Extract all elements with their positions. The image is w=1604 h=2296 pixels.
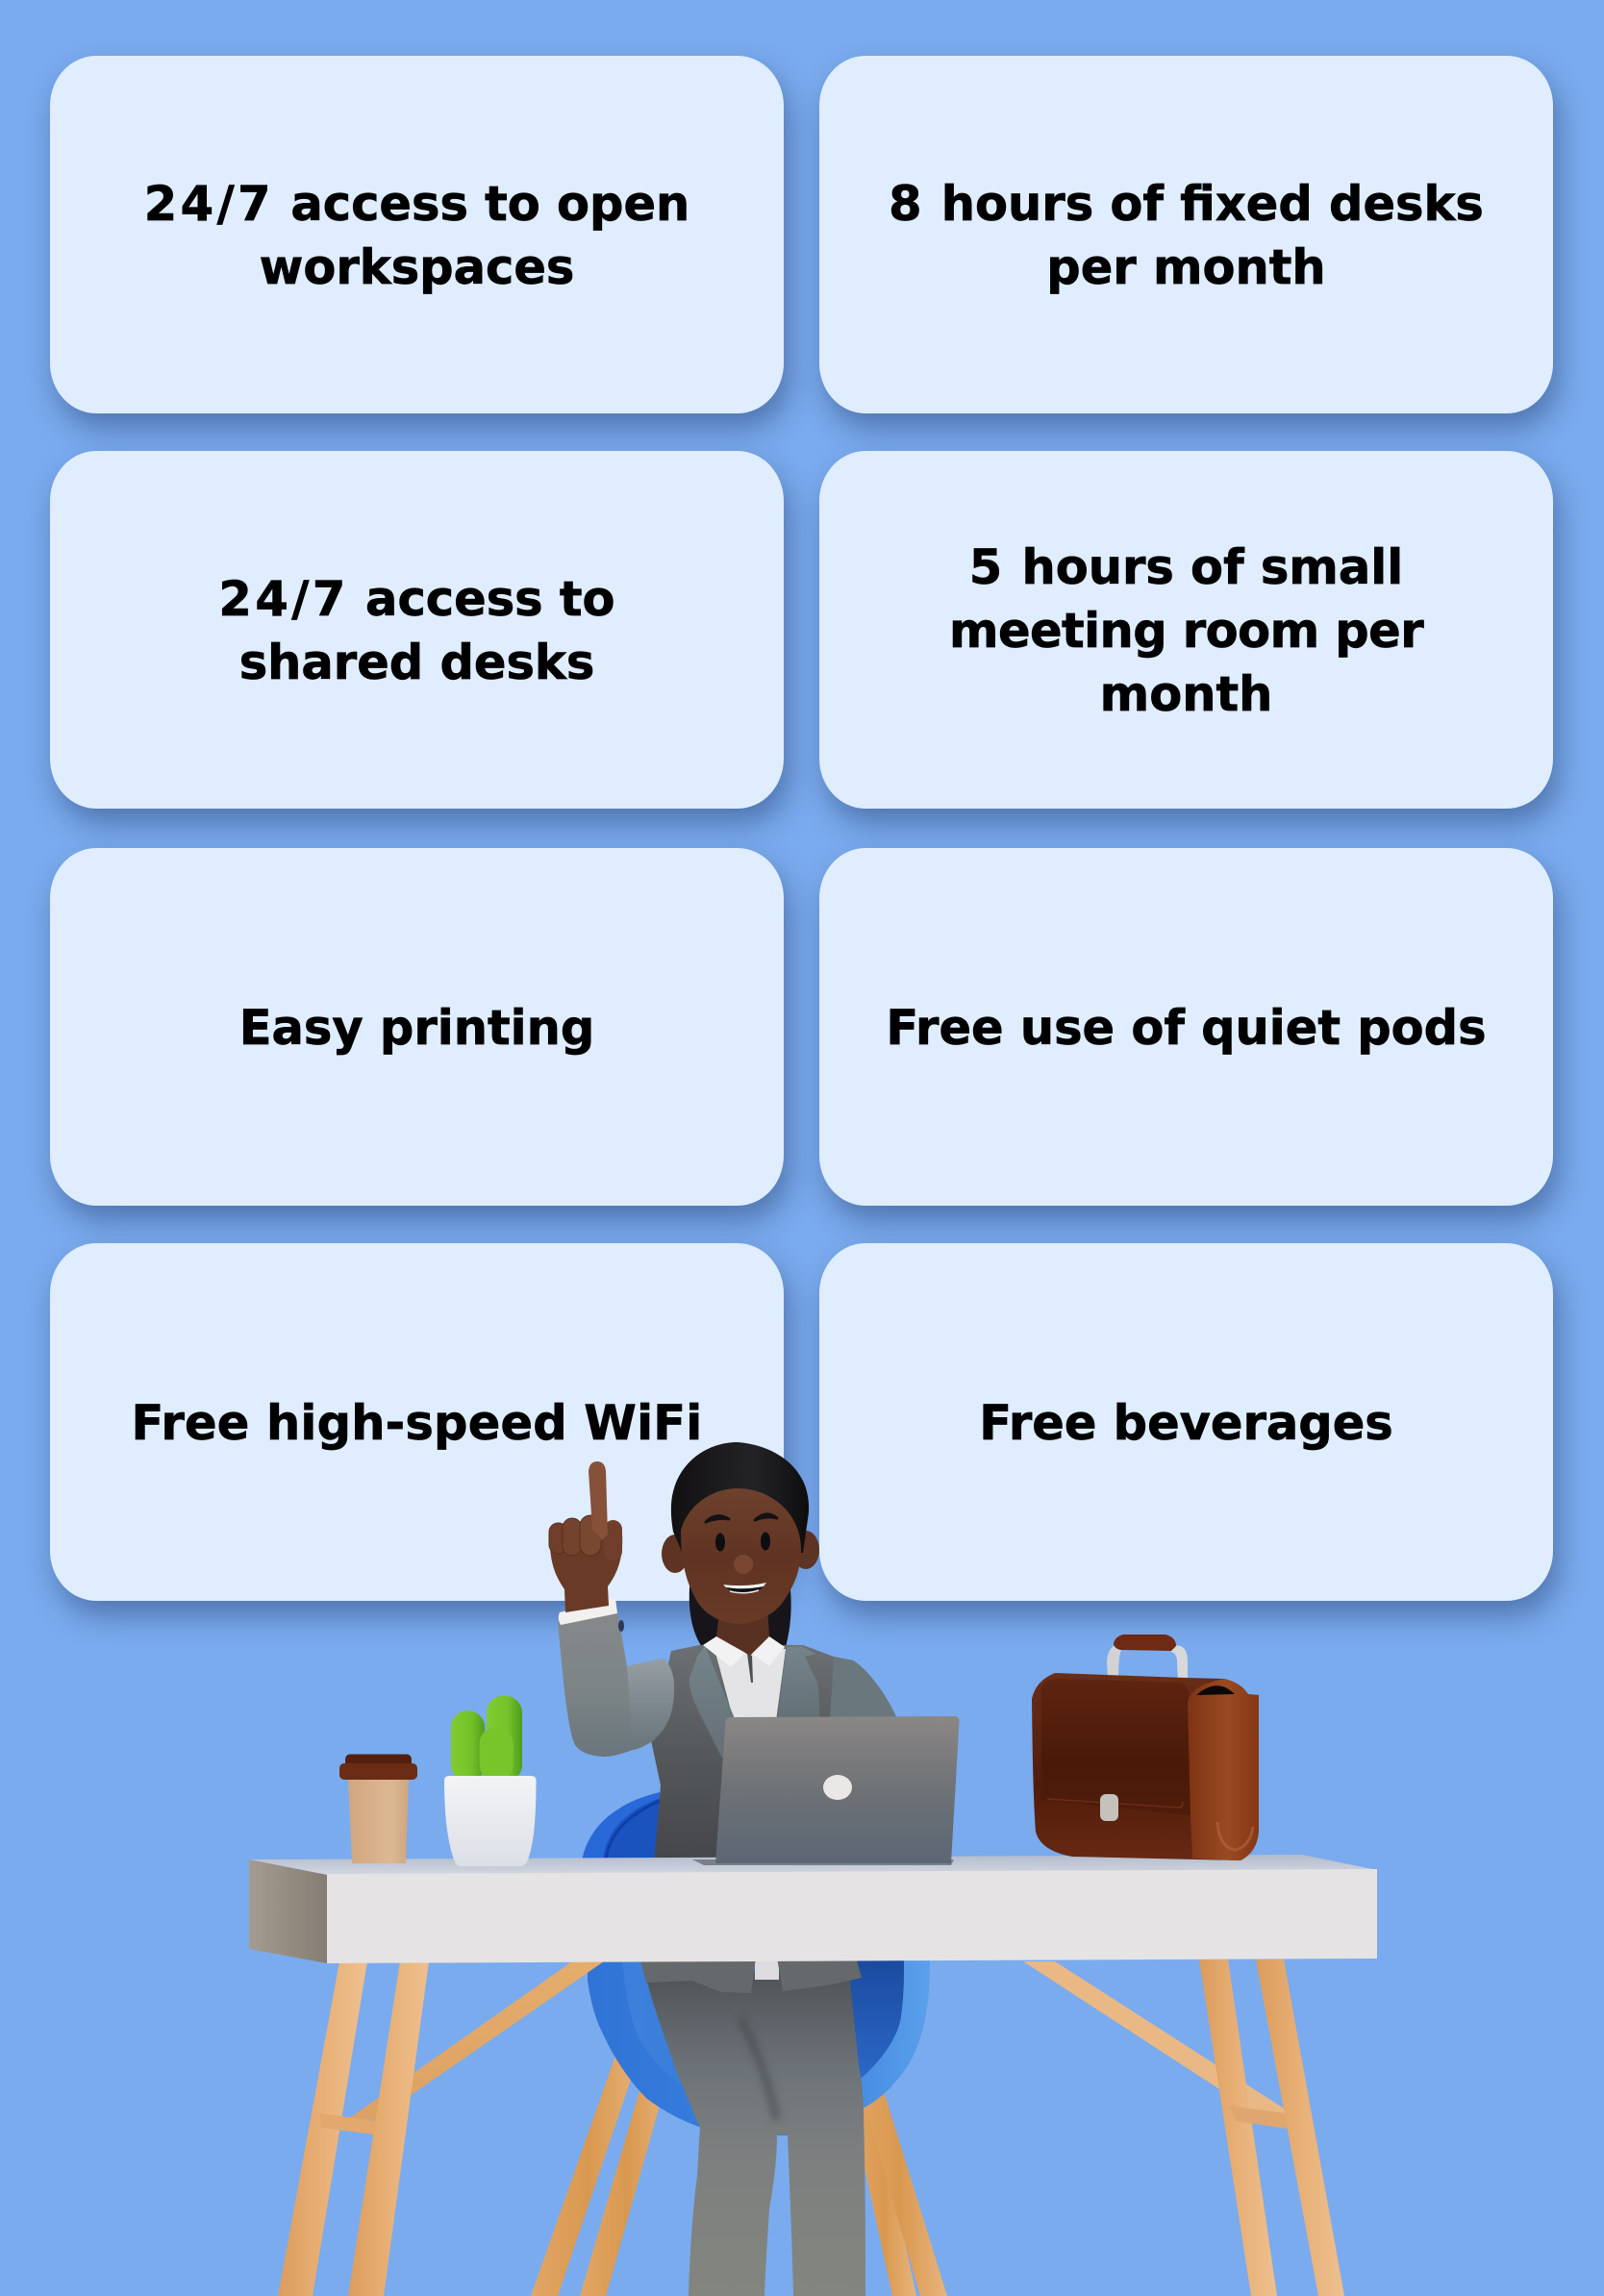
desk [249,1855,1377,1963]
panel: 8 hours of fixed desks [819,56,1553,413]
panel: 24/7 access to open workspaces [50,56,784,413]
plant pot [444,1776,537,1866]
panel: 24/7 access to shared desks: 24/7 access to [218,571,615,627]
panel: easy printing: Easy printing [239,1000,594,1056]
chair shell [582,1792,930,2135]
cactus plant [451,1696,522,1783]
desk legs and braces [278,1959,1344,2296]
panel: free beverages: Free beverages [979,1395,1393,1451]
panel: 5 hours of small meeting room [819,451,1553,809]
neck [716,1606,769,1656]
head [662,1442,819,1624]
panel: 5 hours of small meeting room: 5 hours of small [969,539,1403,595]
panel: 24/7 access to shared desks: shared desks [239,635,594,690]
trousers [644,1971,865,2296]
panel: 24/7 access to open workspaces: 24/7 access to open [144,176,689,232]
panel: 8 hours of fixed desks: per month [1046,239,1326,295]
long hair behind head [689,1577,791,1650]
jacket torso [651,1645,898,1863]
panel: easy printing [50,848,784,1206]
panel: free high-speed wifi: Free high-speed WiFi [132,1395,702,1451]
panel: 5 hours of small meeting room: month [1100,666,1272,722]
raised arm [558,1598,674,1757]
panel: 24/7 access to shared desks [50,451,784,809]
laptop [692,1716,960,1865]
panel: 24/7 access to open workspaces: workspaces [260,239,574,295]
panel: free high-speed wifi [50,1243,784,1601]
panel: free beverages [819,1243,1553,1601]
briefcase [1032,1635,1259,1860]
hand pointing up [549,1461,622,1612]
chair legs [531,2034,947,2296]
jacket bottom and shirt under desk [639,1958,862,1993]
panel: free quiet pods [819,848,1553,1206]
shirt collar [703,1636,785,1683]
panel: 5 hours of small meeting room: meeting room per [949,603,1423,659]
panel: 8 hours of fixed desks: 8 hours of fixed desks [889,176,1484,232]
panel: free quiet pods: Free use of quiet pods [886,1000,1487,1056]
coffee cup [339,1754,417,1863]
